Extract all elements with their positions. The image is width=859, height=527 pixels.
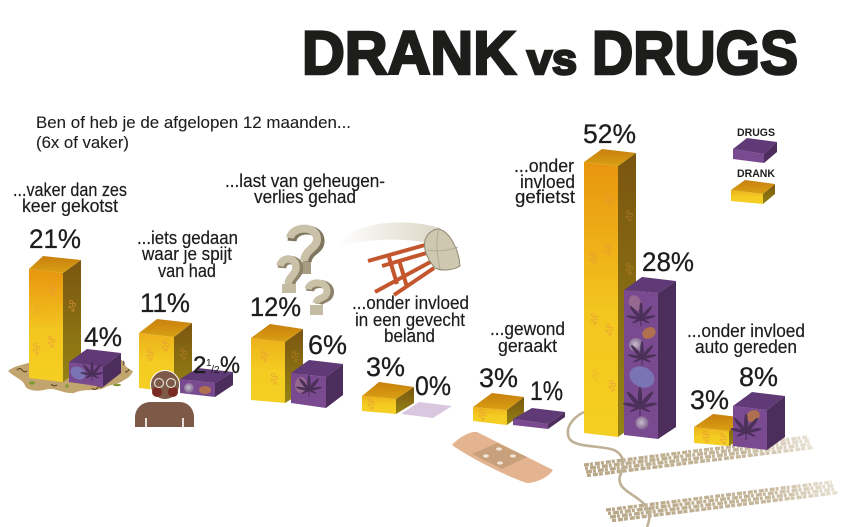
percentages: 1% [530, 376, 563, 406]
bar: 8% drugs auto [730, 392, 785, 450]
label: auto [687, 321, 805, 357]
label: gevecht: in een gevecht [355, 310, 465, 330]
legend: DRUGS [737, 127, 775, 139]
label: geheugenverlies [225, 171, 385, 207]
bar: 2,5% drugs spijt [180, 368, 233, 397]
label: gekotst: ...vaker dan zes [13, 180, 127, 200]
bar: 12% drank geheugen [251, 324, 303, 403]
bar: 21% drank gekotst [29, 256, 81, 382]
label: spijt [137, 228, 238, 281]
bar: 3% drank gevecht [362, 382, 414, 414]
percentages: 52% [583, 119, 636, 149]
percentages: 28% [642, 247, 694, 277]
label: spijt: waar je spijt [141, 244, 232, 264]
percentages: 11% [140, 288, 190, 318]
percentages: % [220, 352, 240, 379]
intro text: (6x of vaker) [36, 133, 129, 152]
label: gewond: geraakt [498, 336, 557, 356]
percentages: 21% [29, 224, 81, 254]
percentages: 0% [415, 371, 451, 401]
bar: 52% drank gefietst [584, 149, 636, 437]
label: auto: auto gereden [695, 337, 797, 357]
percentages: 6% [308, 330, 347, 360]
label: gefietst: gefietst [515, 187, 575, 207]
label: gefietst: ...onder [514, 156, 574, 176]
percentages: / [211, 364, 215, 376]
bar: 1% drugs gewond [513, 408, 565, 429]
label: gefietst [514, 156, 575, 207]
label: gekotst [13, 180, 127, 216]
percentages: 3% [366, 352, 405, 382]
bar: 4% drugs gekotst [68, 349, 121, 387]
percentages: 3% [479, 363, 518, 393]
title: vs [527, 35, 577, 84]
intro text [36, 113, 351, 152]
label: gewond: ...gewond [490, 319, 565, 339]
illustration: plaster [452, 432, 553, 483]
label: gefietst: invloed [520, 172, 575, 192]
percentages: 12% [250, 292, 301, 322]
percentages [29, 119, 778, 415]
title: DRUGS [592, 19, 798, 87]
illustration: swinging stool [338, 222, 460, 295]
percentages: 2 [193, 352, 206, 379]
illustration: puddle of vomit [8, 360, 133, 393]
label: gevecht [352, 293, 469, 346]
legend: DRANK [737, 168, 775, 180]
bar: 3% drank gewond [473, 393, 524, 425]
legend [731, 127, 777, 204]
illustration: question marks [280, 229, 330, 315]
bar: 11% drank spijt [139, 319, 192, 392]
title [302, 19, 798, 87]
bar: 3% drank auto [694, 414, 747, 446]
bar: 6% drugs geheugen [291, 360, 343, 408]
label: gewond [490, 319, 565, 356]
intro text: Ben of heb je de afgelopen 12 maanden... [36, 113, 351, 132]
label: spijt: ...iets gedaan [137, 228, 238, 248]
title: DRANK [302, 19, 516, 87]
bar: 28% drugs gefietst [623, 277, 676, 439]
percentages: 3% [690, 385, 729, 415]
percentages: 1 [206, 358, 212, 369]
tire tracks [584, 437, 838, 520]
label: spijt: van had [158, 261, 216, 281]
percentages: 4% [84, 322, 122, 352]
illustration: swerving line [568, 412, 649, 527]
illustration: person with glasses [135, 370, 194, 427]
label: gevecht: ...onder invloed [352, 293, 469, 313]
bar: 0% drugs gevecht [401, 402, 452, 418]
label: auto: ...onder invloed [687, 321, 805, 341]
label: gekotst: keer gekotst [22, 196, 118, 216]
label: geheugenverlies: ...last van geheugen- [225, 171, 385, 191]
percentages: 2 [214, 365, 220, 376]
label: geheugenverlies: verlies gehad [254, 187, 356, 207]
percentages: 8% [739, 362, 778, 392]
label: gevecht: beland [384, 326, 435, 346]
